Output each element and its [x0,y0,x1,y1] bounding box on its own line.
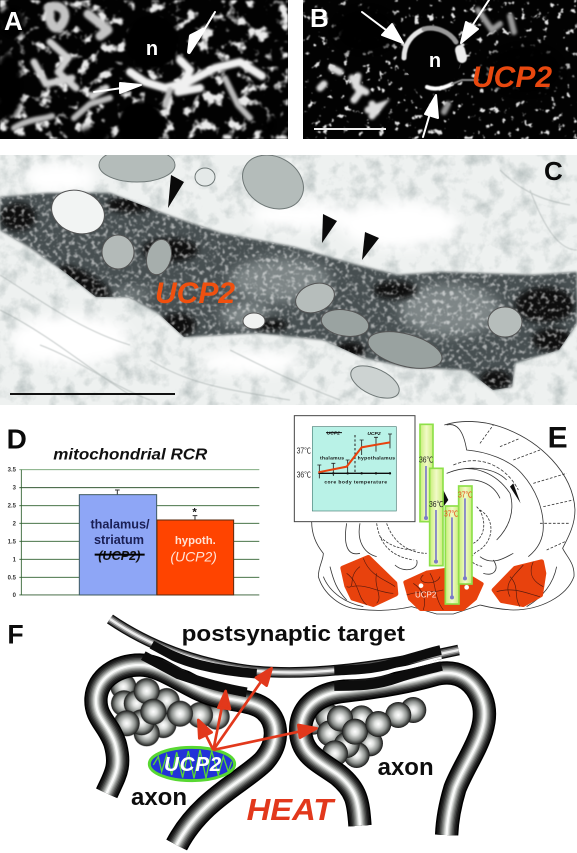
axis labels: 1 [13,557,17,563]
arrowheads [168,175,379,260]
label: UCP2: UCP2 [155,277,235,310]
mitochondrion: UCP2 [164,753,222,776]
probe temperature labels: 37℃ [458,491,472,500]
label: A: A [4,6,23,36]
probe temperature labels: 36℃ [419,456,433,465]
inset temperature graph: thalamus [320,455,344,461]
label: axon left: axon [131,784,187,811]
bar: hypothalamus [157,520,234,595]
axon tubes [96,665,485,845]
significance star: * [192,506,197,518]
probe temperature labels [419,456,472,519]
probe temperature labels: 36℃ [429,500,443,509]
axis labels: 0 [13,593,17,599]
scale bar C [10,393,175,395]
panel E: brain atlas section [294,416,575,614]
inset temperature graph: UCP2 [367,431,381,437]
axis labels: 3.5 [8,468,17,474]
label: postsynaptic target: postsynaptic target [182,621,406,646]
inset temperature graph: hypothalamus [358,455,395,461]
arrows in A [94,12,215,93]
red region: right amygdala [494,562,544,605]
scale bar B [314,128,386,130]
label: C: C [544,156,563,186]
label: F: F [7,619,24,649]
panel C: electron micrograph [0,144,577,405]
axis labels [8,468,17,599]
panel B: fluorescence micrograph [303,0,577,139]
synaptic densities [143,645,442,692]
label: n: n [429,50,441,72]
error bars [115,490,197,520]
brain outline [312,421,575,614]
label: UCP2: UCP2 [472,61,552,94]
bar: hypothalamus: hypoth. [175,535,216,547]
label: HEAT: HEAT [247,793,336,827]
inset temperature graph [294,416,415,522]
axis labels: 1.5 [8,539,17,545]
axis labels: 2 [13,521,17,527]
inset temperature graph: core body temperature [324,479,387,485]
label: E: E [548,422,568,455]
panel D: bar chart [7,423,259,599]
panel F: synapse diagram [7,619,485,845]
label: UCP2 in hypothalamus: UCP2 [415,591,437,600]
synaptic vesicles: left bouton [110,674,230,746]
microdialysis probes [420,424,472,604]
label: D: D [7,423,27,454]
inset temperature graph: 36℃ [297,470,311,479]
label: B: B [310,3,329,33]
label: n: n [146,38,158,60]
probe temperature labels: 37℃ [444,510,458,519]
mitochondria and vacuole in band [45,183,522,375]
bar: hypothalamus: (UCP2) [170,549,217,565]
bar: thalamus/striatum: thalamus/ [90,518,150,532]
synaptic vesicles: right bouton [300,697,426,768]
bar: thalamus/striatum: striatum [94,533,144,547]
label: axon right: axon [378,754,434,781]
axis labels: 2.5 [8,504,17,510]
upper mitochondria [99,144,404,405]
chart title: mitochondrial RCR [53,446,208,463]
dark axon band [0,193,577,390]
bar: thalamus/striatum: (UCP2) [98,549,140,563]
mitochondrion [149,747,235,781]
inset temperature graph: 37℃ [297,446,311,455]
gridlines [19,470,259,595]
axis labels: 0.5 [8,575,17,581]
axis labels: 3 [13,486,17,492]
heat arrows [198,668,317,750]
inset temperature graph: UCP2 [327,430,340,436]
arrows in B [362,0,489,137]
red region: left amygdala [343,557,396,605]
bar: thalamus/striatum [79,495,157,595]
panel A: fluorescence micrograph [0,0,288,148]
red region: hypothalamus [405,570,482,609]
postsynaptic membrane [110,619,459,672]
